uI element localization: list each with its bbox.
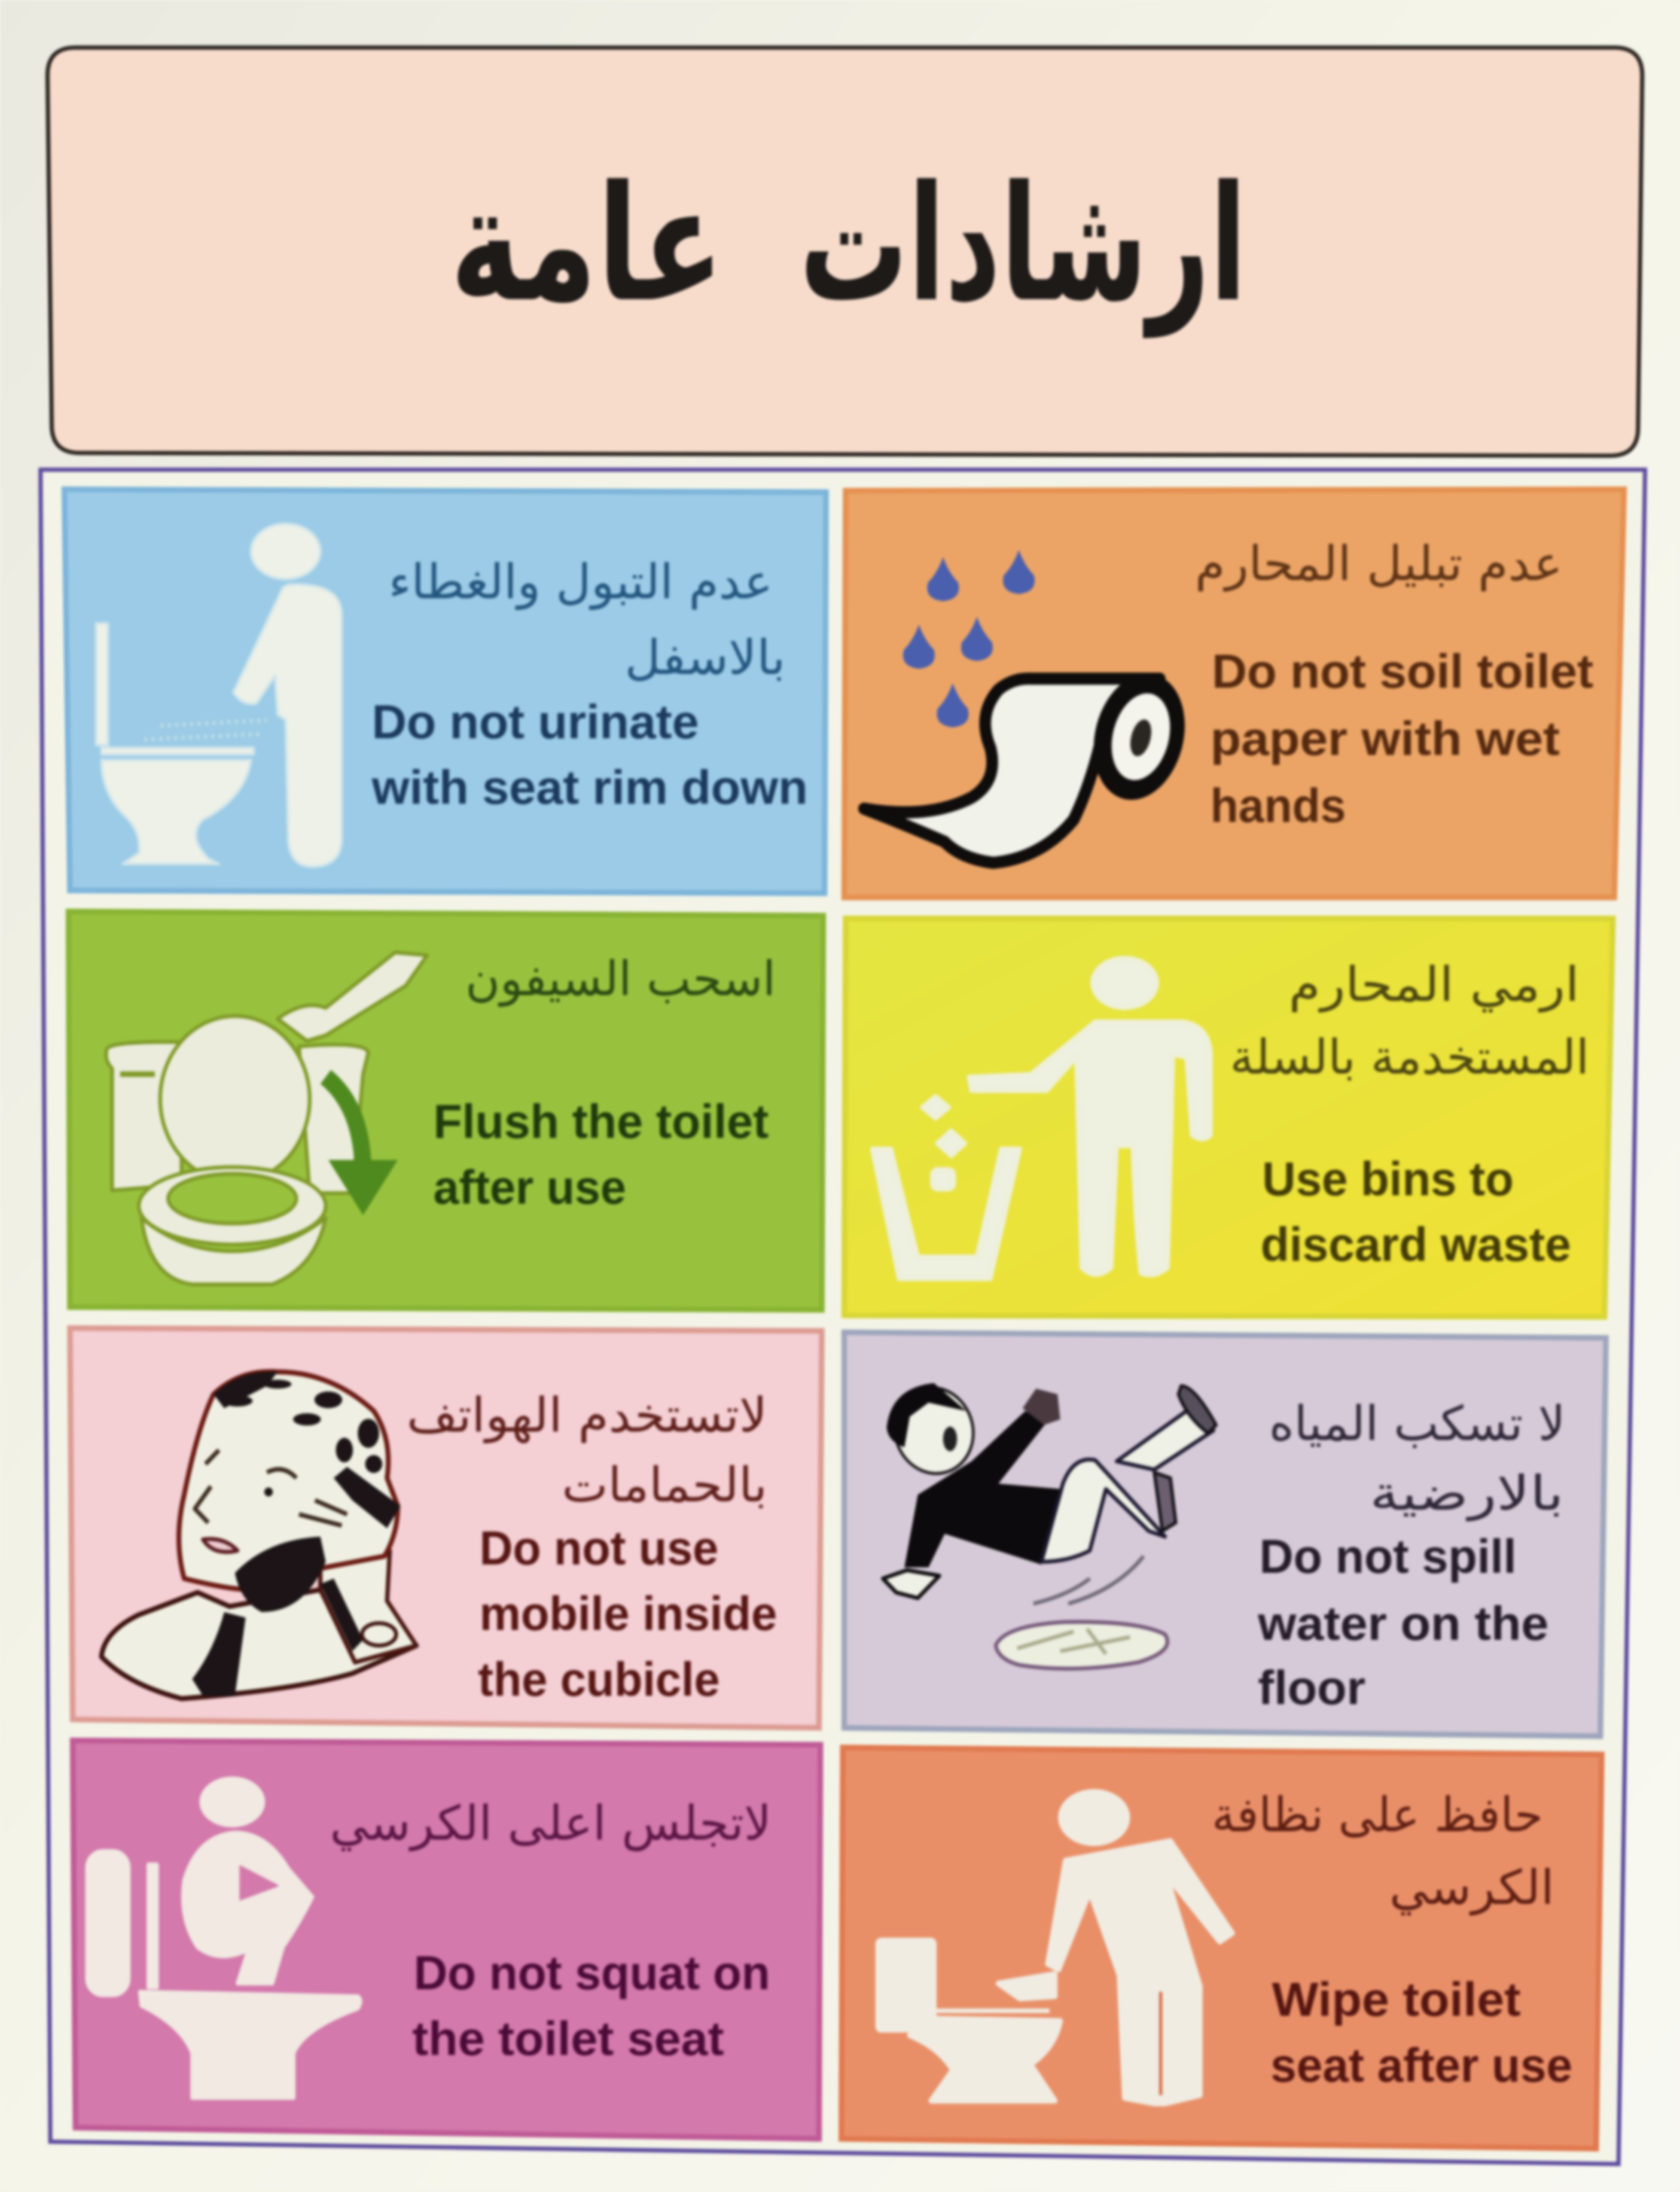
english text line 3: floor <box>1258 1661 1365 1714</box>
arabic text: حافظ على نظافة <box>1212 1787 1543 1843</box>
panel: do not squat <box>73 1740 821 2139</box>
english text: Use bins to <box>1262 1152 1514 1205</box>
english text: Do not soil toilet <box>1212 645 1593 698</box>
title word: general: عامة <box>450 151 724 337</box>
title panel <box>47 47 1642 456</box>
panel: do not use mobile <box>70 1328 822 1728</box>
english text line 3: the cubicle <box>478 1652 720 1706</box>
icon: man on the phone <box>102 1372 416 1698</box>
english text: Flush the toilet <box>433 1095 769 1148</box>
arabic text line 2: بالحمامات <box>562 1457 767 1513</box>
panel: use bins <box>844 918 1613 1317</box>
arabic text: اسحب السيفون <box>465 951 776 1007</box>
outer frame <box>41 470 1645 2164</box>
icon: person discarding waste in bin <box>872 958 1211 1279</box>
panel: do not spill water <box>844 1332 1606 1736</box>
english text line 3: hands <box>1211 779 1346 832</box>
english text: Do not urinate <box>372 695 699 748</box>
english text line 2: paper with wet <box>1211 712 1560 765</box>
arabic text: لا تسكب المياه <box>1269 1396 1565 1451</box>
icon: wet toilet paper roll <box>864 550 1198 863</box>
english text line 2: the toilet seat <box>412 2012 724 2065</box>
english text: Do not spill <box>1260 1530 1517 1583</box>
panel: do not urinate with seat down <box>64 489 826 893</box>
arabic text: لاتستخدم الهواتف <box>407 1387 767 1444</box>
icon: person wiping toilet seat <box>878 1792 1232 2103</box>
panel: wipe toilet seat <box>841 1747 1602 2149</box>
english text line 2: after use <box>433 1161 626 1214</box>
english text line 2: water on the <box>1257 1597 1548 1650</box>
arabic text line 2: المستخدمة بالسلة <box>1230 1030 1589 1085</box>
icon: man slipping on puddle <box>881 1374 1216 1669</box>
icon: toilet with brush and arrow <box>106 952 427 1284</box>
english text: Do not squat on <box>414 1946 770 1999</box>
arabic text: عدم التبول والغطاء <box>389 554 773 610</box>
arabic text line 2: بالارضية <box>1370 1466 1564 1521</box>
arabic text: لاتجلس اعلى الكرسي <box>330 1795 772 1852</box>
icon: man urinating at toilet <box>96 523 342 867</box>
english text line 2: mobile inside <box>480 1587 777 1640</box>
panel: do not soil toilet paper <box>844 489 1624 897</box>
panel: flush the toilet <box>69 912 823 1310</box>
arabic text line 2: بالاسفل <box>625 629 785 685</box>
arabic text: ارمي المحارم <box>1289 957 1580 1012</box>
icon: person squatting on toilet <box>87 1779 361 2098</box>
title word: instructions: ارشادات <box>800 151 1247 339</box>
arabic text line 2: الكرسي <box>1389 1860 1554 1916</box>
english text: Do not use <box>480 1521 718 1575</box>
english text line 2: discard waste <box>1261 1218 1571 1271</box>
english text line 2: with seat rim down <box>371 761 808 814</box>
arabic text: عدم تبليل المحارم <box>1195 536 1563 592</box>
english text: Wipe toilet <box>1272 1973 1521 2026</box>
english text line 2: seat after use <box>1270 2038 1572 2091</box>
